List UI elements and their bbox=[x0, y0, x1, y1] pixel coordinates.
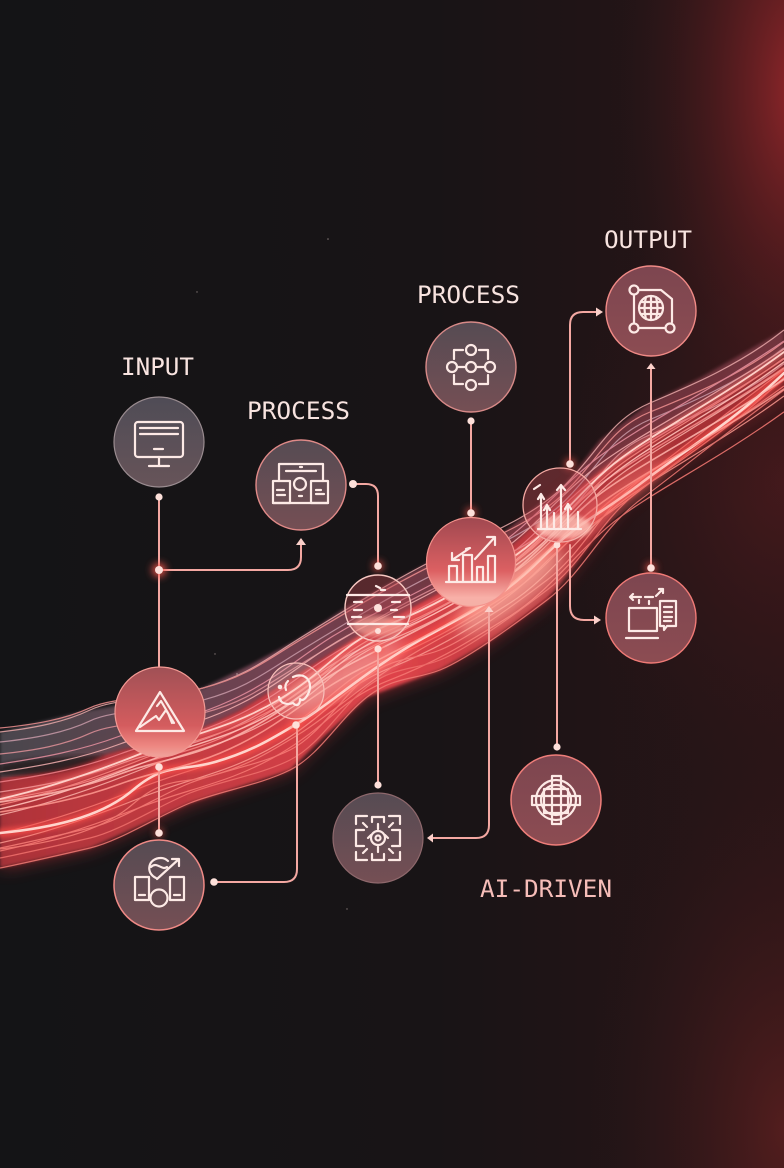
connector: triangle to cycle node bbox=[158, 767, 160, 833]
connector lines bbox=[159, 312, 651, 882]
connector dots and arrowheads bbox=[152, 308, 656, 886]
connector: process two to chart node bbox=[470, 421, 472, 513]
node: chart hot bbox=[426, 518, 516, 606]
icon: rising bars bbox=[534, 485, 581, 529]
icon: ring swirl bbox=[279, 675, 310, 705]
connector: bars to laptop bbox=[570, 545, 596, 620]
icon: bar chart arrows bbox=[446, 537, 495, 582]
connector: input branch to process bbox=[159, 540, 301, 570]
node: triangle bbox=[115, 667, 205, 757]
heading: process one: PROCESS bbox=[247, 397, 350, 425]
node: ring glass bbox=[268, 663, 324, 719]
node: cycle bbox=[114, 840, 204, 930]
icon: crosshair globe bbox=[532, 776, 580, 824]
icon: globe document bbox=[630, 286, 674, 332]
icon: mountain triangle bbox=[136, 692, 184, 731]
node: output globe document bbox=[606, 266, 696, 356]
icon: node network bbox=[447, 345, 495, 390]
connector: laptop to output bbox=[650, 366, 652, 568]
node: laptop document bbox=[606, 573, 696, 663]
connector: cycle node to ring node bbox=[214, 725, 297, 882]
connector: process to dome node bbox=[353, 484, 378, 566]
specks bbox=[196, 238, 348, 910]
connector: dome to scan node bbox=[377, 649, 379, 785]
node: globe target bbox=[511, 755, 601, 845]
node: rising bars glass bbox=[523, 468, 597, 542]
icon: laptop document bbox=[626, 589, 676, 638]
heading: input: INPUT bbox=[121, 353, 194, 381]
node: network bbox=[426, 322, 516, 412]
flowing light ribbon bbox=[0, 326, 784, 868]
connector: bars to globe bbox=[556, 545, 558, 747]
connector: scan node to chart node bbox=[431, 610, 489, 838]
icon: dome panel bbox=[347, 586, 409, 624]
connector: bars to output bbox=[570, 312, 598, 464]
node: scanner bbox=[333, 793, 423, 883]
connector: input to triangle node bbox=[158, 497, 160, 668]
icon: monitor bbox=[135, 422, 183, 466]
icon: eye scanner bbox=[356, 816, 400, 860]
heading: process two: PROCESS bbox=[417, 281, 520, 309]
node: dome glass bbox=[345, 575, 411, 641]
node: dashboard bbox=[256, 440, 346, 530]
heading: ai-driven: AI-DRIVEN bbox=[480, 875, 612, 903]
icon: cycle blocks bbox=[135, 858, 184, 906]
node: monitor bbox=[114, 397, 204, 487]
heading: output: OUTPUT bbox=[604, 226, 692, 254]
icon: dashboard panels bbox=[273, 464, 328, 503]
